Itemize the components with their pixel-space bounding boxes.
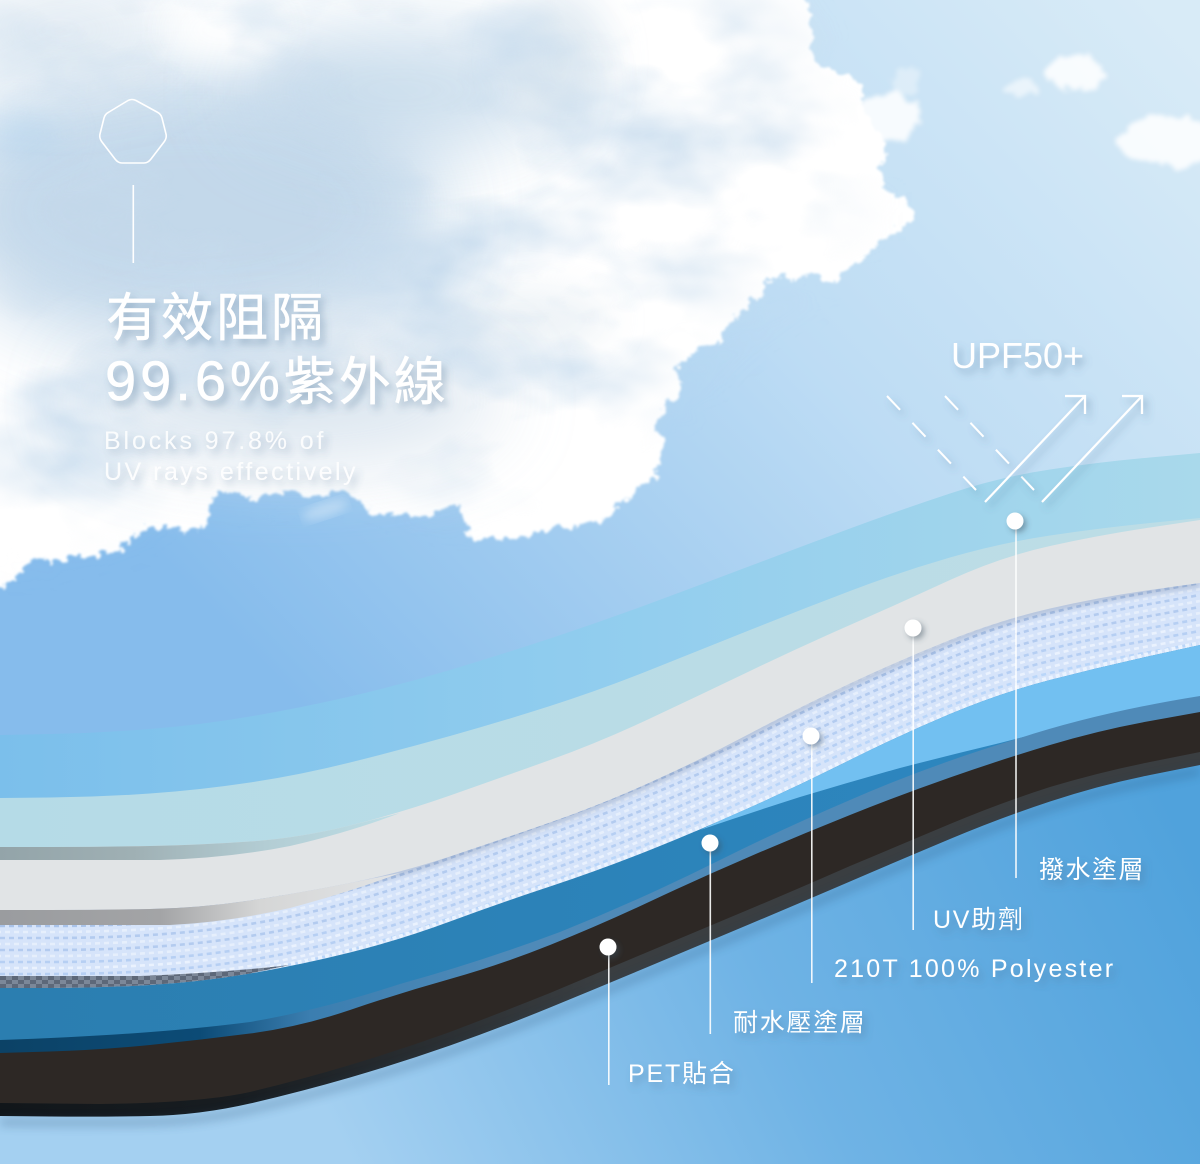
callout: UV additive bbox=[904, 620, 1025, 934]
cloud: large cumulus bbox=[0, 0, 910, 610]
callout: polyester fabric bbox=[802, 728, 1115, 983]
icon: incoming UV dashed rays bbox=[887, 396, 1034, 490]
edge band above PET laminate bbox=[0, 696, 1200, 1164]
callout: water-repellent coating: 撥水塗層 bbox=[1039, 856, 1145, 884]
callout: water-repellent coating bbox=[1006, 512, 1145, 884]
subtitle bbox=[104, 427, 358, 486]
lower sky bbox=[0, 765, 1200, 1164]
subtitle: UV rays effectively bbox=[104, 458, 358, 486]
icon: reflected UV arrows bbox=[985, 396, 1142, 502]
title: 有效阻隔 bbox=[106, 290, 326, 348]
divider line under icon bbox=[132, 185, 134, 263]
layer: grey-white UV additive bbox=[0, 520, 1200, 1164]
callout: polyester fabric: 210T 100% Polyester bbox=[834, 955, 1115, 983]
layer: deep blue waterproof coating bbox=[0, 645, 1200, 1164]
layer: PET laminate bbox=[0, 712, 1200, 1164]
callout: PET laminate: PET貼合 bbox=[628, 1060, 736, 1088]
callout: hydrostatic coating: 耐水壓塗層 bbox=[733, 1009, 867, 1037]
layer: sun-side film bbox=[0, 453, 1200, 1164]
UPF50+ label: UPF50+ bbox=[951, 335, 1084, 376]
icon: heptagon outline bbox=[100, 100, 166, 163]
title: 99.6%紫外線 bbox=[105, 349, 449, 412]
cloud: small wisp below main cloud bbox=[300, 496, 350, 524]
subtitle: Blocks 97.8% of bbox=[104, 427, 326, 455]
edge band under grey-white layer bbox=[0, 873, 400, 925]
light blue band under weave at right bbox=[700, 645, 1200, 830]
title bbox=[105, 290, 449, 412]
edge band at bottom of PET laminate bbox=[0, 752, 1200, 1164]
soft shadow below laminate bbox=[0, 771, 1200, 1123]
layer: 210T polyester weave bbox=[0, 583, 1200, 976]
callout: UV additive: UV助劑 bbox=[933, 906, 1025, 934]
layer: pale water-repellent coating bbox=[0, 518, 1200, 1164]
checker edge of weave at left bbox=[0, 965, 290, 988]
edge band under pale coating bbox=[0, 813, 400, 860]
callout: hydrostatic coating bbox=[702, 834, 867, 1037]
cloud: small wisps upper right bbox=[858, 55, 1200, 168]
callout: PET laminate bbox=[600, 938, 736, 1088]
